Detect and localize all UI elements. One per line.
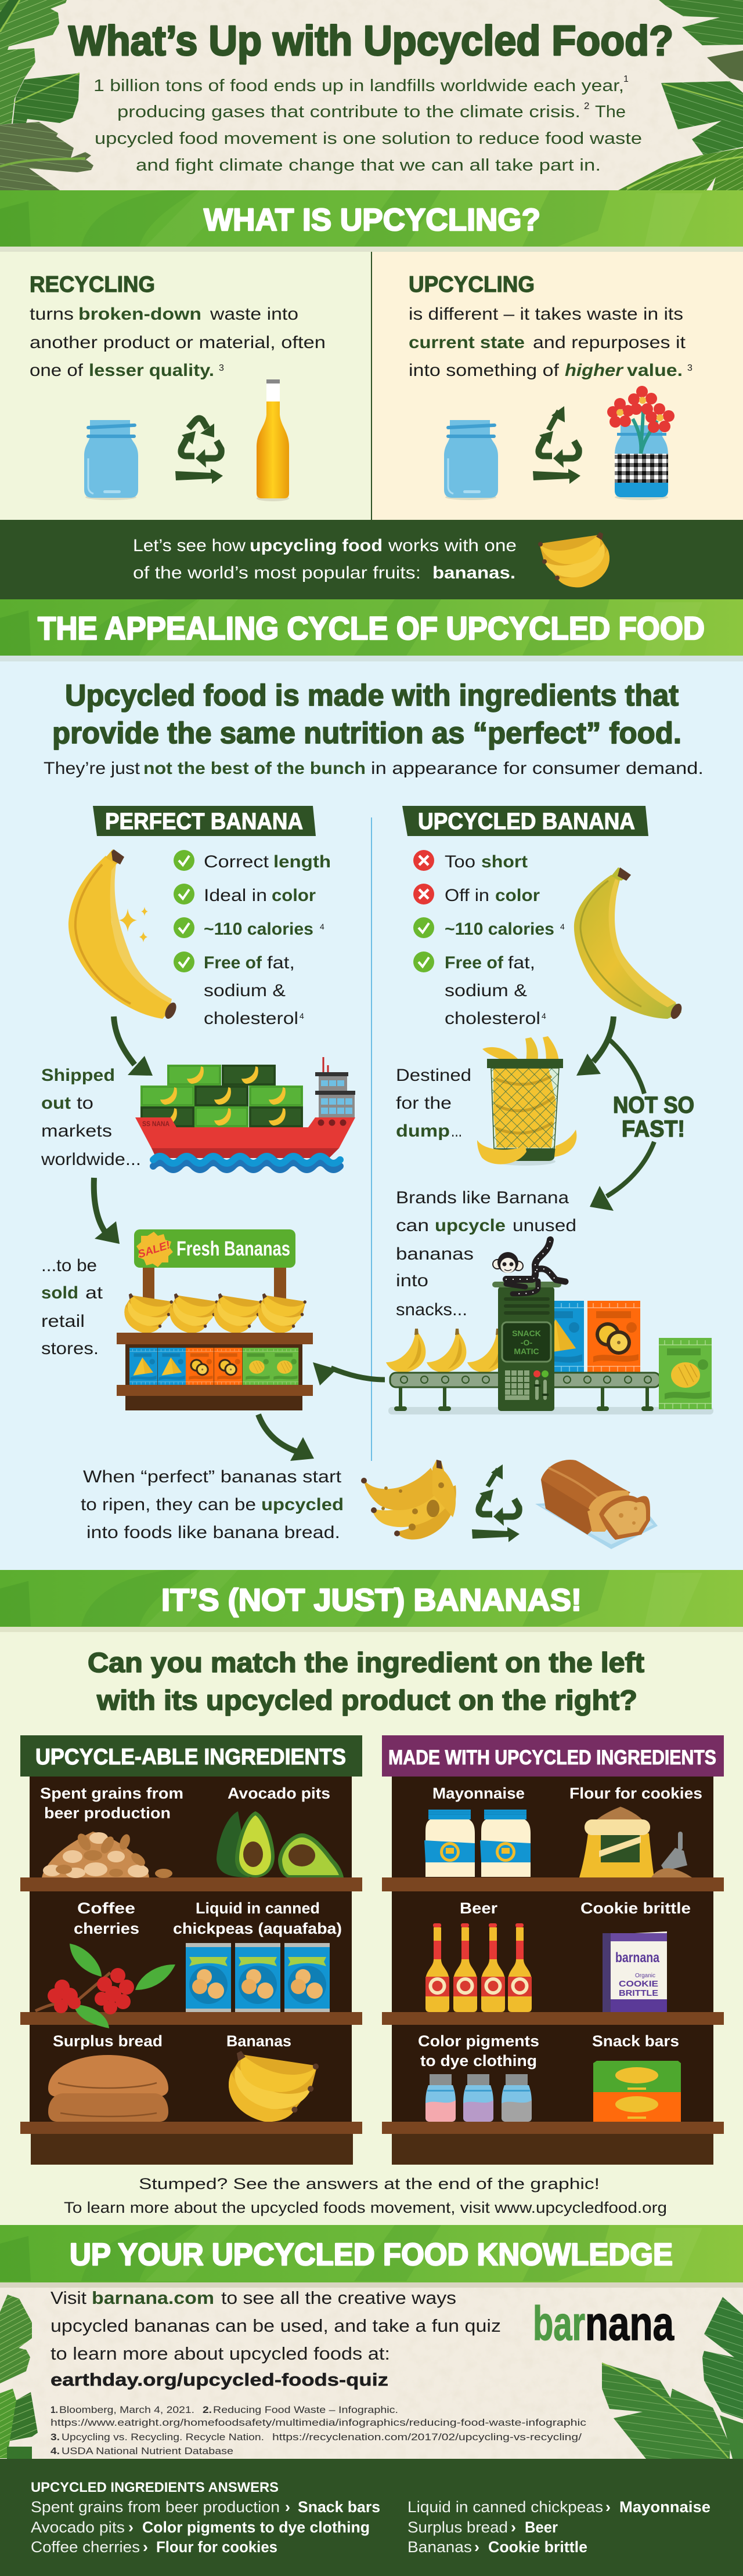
text: visit barnana: to see all the creative ways <box>221 2288 456 2308</box>
header: made with upcycled ingredients <box>382 1735 724 1777</box>
references: 1. <box>51 2404 58 2415</box>
heading: nutrition statement <box>52 679 681 750</box>
shelf labels: Mayonnaise <box>432 1785 525 1802</box>
text: visit barnana: earthday.org/upcycled-foods-quiz <box>51 2369 388 2390</box>
check: color <box>174 884 194 905</box>
references: Upcycling vs. Recycling. Recycle Nation. <box>62 2432 264 2443</box>
arrow <box>533 469 580 484</box>
upcycled banana checklist: sodium & <box>445 981 527 1000</box>
icon: beer bottles <box>425 1923 532 2012</box>
icon: jar vase with flowers <box>607 386 675 500</box>
icon: canned chickpeas <box>186 1943 330 2012</box>
check: length <box>174 850 194 871</box>
upcycled banana checklist <box>413 850 565 1028</box>
text: brands like barnana: into <box>396 1271 428 1290</box>
icon: mayonnaise jars <box>424 1810 531 1877</box>
perfect banana checklist: Correct <box>204 852 269 871</box>
references: Bloomberg, March 4, 2021. <box>59 2404 194 2415</box>
arrow: dump branch <box>610 1040 644 1094</box>
badge: sale <box>136 1232 173 1267</box>
intro paragraph: The <box>595 103 626 121</box>
icon: banana bread <box>535 1460 658 1549</box>
icon: cookie brittle box: barnana <box>615 1950 660 1966</box>
cross: off in color <box>413 884 434 905</box>
check: free of fat <box>413 951 434 972</box>
check: free of fat <box>174 951 194 972</box>
text: ripening bananas <box>81 1467 344 1542</box>
panel: matching game background <box>0 1627 743 2225</box>
icon: empty jar <box>84 420 138 500</box>
section band: not just bananas: IT’S (NOT JUST) BANANAS! <box>161 1583 582 1618</box>
recycling description: 3 <box>219 363 224 373</box>
perfect banana checklist: length <box>273 852 331 871</box>
shelf labels: Cookie brittle <box>580 1900 691 1917</box>
logo: barnana: nana <box>585 2296 675 2350</box>
references <box>51 2404 587 2456</box>
callout: bananas intro band: works with one <box>388 536 517 555</box>
callout: not so fast: NOT SO <box>613 1092 694 1118</box>
icon: bananas <box>229 2051 319 2122</box>
section band: appealing cycle <box>0 599 743 656</box>
intro paragraph: 2 <box>584 100 589 111</box>
arrow: conveyor to store <box>313 1362 385 1385</box>
panel: cycle background <box>0 656 743 1570</box>
heading: recycling: RECYCLING <box>30 272 155 297</box>
badge: sale: SALE! <box>136 1239 172 1261</box>
panel: footer paper background <box>0 2282 743 2459</box>
upcycling description <box>409 305 692 380</box>
icon: coffee cherries <box>35 1944 175 2028</box>
subheading: in appearance for consumer demand. <box>371 759 704 778</box>
answers list: › <box>474 2538 479 2556</box>
answers list: Spent grains from beer production <box>31 2498 280 2516</box>
text: ripening bananas: into foods like banana bread. <box>86 1523 340 1542</box>
text: sold at retail: retail <box>41 1312 85 1331</box>
badge: upcycled banana: UPCYCLED BANANA <box>418 809 635 834</box>
illustration: cargo ship: SS NANA <box>142 1120 169 1128</box>
icon: banana bunch <box>538 532 609 587</box>
intro paragraph: and fight climate change that we can all take part in. <box>136 156 601 175</box>
shelf labels <box>418 1785 702 2070</box>
callout: not so fast: FAST! <box>622 1116 685 1142</box>
illustration: snack-o-matic conveyor <box>386 1240 713 1414</box>
text: shipped out: out <box>41 1094 71 1113</box>
text: brands like barnana: unused <box>513 1216 576 1235</box>
icon: spent grains <box>42 1832 172 1878</box>
text: destined for the dump: ... <box>451 1121 462 1141</box>
callout: bananas intro band: of the world’s most popular fruits: <box>133 563 421 583</box>
illustration: snack-o-matic conveyor: -O- <box>521 1338 532 1347</box>
arrow: banana to dump <box>576 1016 614 1076</box>
panel: recycling <box>0 252 372 520</box>
decorative leaves bottom left <box>0 2295 38 2459</box>
section band: knowledge: UP YOUR UPCYCLED FOOD KNOWLEDGE <box>70 2237 673 2272</box>
icon: recycle symbol <box>181 418 221 468</box>
section band: appealing cycle: THE APPEALING CYCLE OF UPCYCLED FOOD <box>38 610 705 646</box>
shelf labels: to dye clothing <box>420 2052 537 2070</box>
shelf labels <box>40 1785 342 2050</box>
intro paragraph: 1 <box>623 74 629 84</box>
text: brands like barnana: bananas <box>396 1244 474 1264</box>
illustration: fresh bananas market stand <box>117 1229 313 1410</box>
upcycling description: and repurposes it <box>533 333 686 352</box>
text: brands like barnana <box>396 1188 576 1319</box>
icon: upcycle arrows <box>539 406 579 468</box>
title: What’s Up with Upcycled Food? <box>68 18 673 64</box>
upcycled banana checklist: color <box>495 886 540 905</box>
check: calories <box>413 917 434 938</box>
icon: upcycled banana <box>574 867 684 1021</box>
shelf labels: Beer <box>460 1900 498 1917</box>
text: visit barnana: Visit <box>51 2288 86 2308</box>
upcycled banana checklist: short <box>481 852 528 871</box>
references: 3. <box>51 2432 60 2443</box>
section band: what is upcycling <box>0 190 743 252</box>
answers list: Bananas <box>407 2538 472 2556</box>
shelf labels: beer production <box>44 1804 171 1822</box>
illustration: waste basket full of bananas <box>477 1036 576 1166</box>
text: shipped out: worldwide... <box>41 1150 141 1169</box>
perfect banana checklist: Ideal in <box>204 886 267 905</box>
text: destined for the dump <box>396 1066 471 1141</box>
upcycling description: current state <box>409 333 525 352</box>
icon: upcycle arrows <box>479 1464 519 1526</box>
arrow: to brands <box>590 1142 654 1211</box>
text: ripening bananas: upcycled <box>261 1495 344 1514</box>
arrow <box>472 1527 520 1542</box>
callout: bananas intro band <box>0 520 743 599</box>
perfect banana checklist: fat, <box>267 953 295 972</box>
shelf labels: Coffee <box>77 1900 135 1917</box>
icon: barnana monkey <box>493 1240 565 1294</box>
icon: avocado <box>217 1811 344 1877</box>
arrow: banana to ship <box>114 1016 153 1076</box>
logo: barnana <box>533 2296 675 2350</box>
perfect banana checklist: sodium & <box>204 981 286 1000</box>
shelf labels: Snack bars <box>592 2032 679 2050</box>
recycling description <box>30 305 326 380</box>
shelf labels: cherries <box>74 1920 139 1937</box>
callout: bananas intro band: bananas. <box>432 563 515 583</box>
references: 4. <box>51 2445 60 2456</box>
text: destined for the dump: dump <box>396 1121 450 1141</box>
text: sold at retail: sold <box>41 1283 78 1303</box>
upcycling description: into something of <box>409 361 560 380</box>
heading: upcycling: UPCYCLING <box>409 272 535 297</box>
illustration: snack-o-matic conveyor: MATIC <box>514 1347 539 1356</box>
answers list: Coffee cherries <box>31 2538 140 2556</box>
heading: answers: UPCYCLED INGREDIENTS ANSWERS <box>31 2480 279 2495</box>
references: https://recyclenation.com/2017/02/upcycling-vs-recycling/ <box>272 2432 582 2443</box>
callout: not so fast <box>613 1092 694 1142</box>
heading: matching question <box>88 1648 644 1716</box>
references: USDA National Nutrient Database <box>62 2445 233 2456</box>
upcycled banana checklist: fat, <box>508 953 535 972</box>
intro paragraph: 1 billion tons of food ends up in landfills worldwide each year, <box>93 77 624 95</box>
recycling description: turns <box>30 305 74 324</box>
icon: perfect banana <box>68 849 179 1021</box>
arrow <box>175 469 223 484</box>
answers list: Flour for cookies <box>156 2538 277 2556</box>
text: destined for the dump: Destined <box>396 1066 471 1085</box>
answers list: Snack bars <box>298 2498 380 2516</box>
section band: not just bananas <box>0 1570 743 1627</box>
references: 2. <box>203 2404 212 2415</box>
answers list: Liquid in canned chickpeas <box>407 2498 603 2516</box>
text: sold at retail: at <box>85 1283 103 1303</box>
text: visit barnana: upcycled bananas can be used, and take a fun quiz <box>51 2315 501 2336</box>
illustration: snack-o-matic conveyor: SNACK <box>512 1329 541 1338</box>
illustration: cargo ship <box>135 1057 355 1170</box>
icon: ripe banana bunch <box>361 1460 456 1540</box>
answers list: Mayonnaise <box>619 2498 710 2516</box>
text: ripening bananas: to ripen, they can be <box>81 1495 256 1514</box>
icon: surplus bread <box>48 2055 168 2122</box>
answers list: › <box>128 2519 134 2536</box>
shelf labels: Liquid in canned <box>196 1900 320 1917</box>
icon: snack bars <box>593 2061 681 2122</box>
icon: cookie brittle box: COOKIE <box>619 1979 658 1989</box>
text: visit barnana <box>51 2288 501 2390</box>
text: shipped out: to <box>77 1094 93 1113</box>
header: upcycle-able ingredients <box>20 1735 362 1777</box>
text: ripening bananas: When “perfect” bananas start <box>83 1467 342 1486</box>
heading: matching question: Can you match the ingredient on the left <box>88 1648 644 1678</box>
upcycling description: value. <box>627 361 683 380</box>
note: stumped <box>64 2175 667 2216</box>
check: calories <box>174 917 194 938</box>
answers list: Color pigments to dye clothing <box>142 2519 370 2536</box>
icon: cookie brittle box <box>603 1931 667 2012</box>
text: shipped out: Shipped <box>41 1066 115 1085</box>
shelf labels: Spent grains from <box>40 1785 183 1802</box>
recycling description: broken-down <box>78 305 201 324</box>
upcycled banana checklist: Free of <box>445 953 504 972</box>
perfect banana checklist <box>174 850 331 1028</box>
text: shipped out: markets <box>41 1121 112 1141</box>
shelf labels: Avocado pits <box>228 1785 330 1802</box>
illustration: fresh bananas market stand: Fresh Bananas <box>176 1238 290 1260</box>
shelf labels: Bananas <box>226 2032 291 2050</box>
text: visit barnana: to learn more about upcycled foods at: <box>51 2343 390 2364</box>
text: shipped out <box>41 1066 141 1169</box>
callout: bananas intro band: Let’s see how <box>133 536 246 555</box>
section band: knowledge <box>0 2225 743 2282</box>
subheading: not the best of the bunch <box>143 759 366 778</box>
heading: nutrition statement: Upcycled food is made with ingredients that <box>65 679 679 712</box>
text: visit barnana: barnana.com <box>92 2288 214 2308</box>
cross: too short <box>413 850 434 871</box>
upcycling description: is different – it takes waste in its <box>409 305 683 324</box>
answers list: › <box>605 2498 611 2516</box>
arrow: store to banana bread <box>258 1414 314 1461</box>
upcycled banana checklist: ~110 calories <box>445 920 554 939</box>
answers list: › <box>511 2519 516 2536</box>
perfect banana checklist: color <box>272 886 316 905</box>
icon: beer bottle <box>257 379 289 501</box>
text: sold at retail: stores. <box>41 1339 99 1358</box>
perfect banana checklist: 4 <box>300 1011 304 1021</box>
references: https://www.eatright.org/homefoodsafety/multimedia/infographics/reducing-food-waste-infographic <box>51 2417 587 2428</box>
text: sold at retail <box>41 1256 103 1358</box>
shelf labels: chickpeas (aquafaba) <box>173 1920 342 1937</box>
icon: color pigment jars <box>425 2074 532 2122</box>
perfect banana checklist: cholesterol <box>204 1009 298 1028</box>
logo: barnana: bar <box>533 2296 585 2350</box>
answers list: Avocado pits <box>31 2519 125 2536</box>
upcycled banana checklist: 4 <box>560 922 565 931</box>
perfect banana checklist: ~110 calories <box>204 920 313 939</box>
note: stumped: To learn more about the upcycled foods movement, visit www.upcycledfood.org <box>64 2199 667 2216</box>
upcycled banana checklist: 4 <box>542 1011 546 1021</box>
upcycled banana checklist: Too <box>445 852 475 871</box>
text: brands like barnana: snacks... <box>396 1300 467 1319</box>
intro paragraph: upcycled food movement is one solution to reduce food waste <box>95 129 642 148</box>
panel: answers <box>0 2459 743 2576</box>
callout: bananas intro band: upcycling food <box>250 536 383 555</box>
decorative leaves top left <box>0 0 93 190</box>
upcycling description: 3 <box>687 363 692 373</box>
heading: nutrition statement: provide the same nutrition as “perfect” food. <box>52 717 681 750</box>
upcycled banana checklist: cholesterol <box>445 1009 540 1028</box>
answers list: › <box>285 2498 290 2516</box>
decorative leaves top right <box>618 0 743 190</box>
references: Reducing Food Waste – Infographic. <box>213 2404 398 2415</box>
note: stumped: Stumped? See the answers at the end of the graphic! <box>139 2175 600 2193</box>
answers list: Beer <box>525 2519 558 2536</box>
text: destined for the dump: for the <box>396 1094 452 1113</box>
panel: made with upcycled ingredients shelves <box>382 1735 724 2165</box>
intro paragraph <box>93 74 642 175</box>
text: sold at retail: ...to be <box>41 1256 97 1275</box>
shelf labels: Flour for cookies <box>569 1785 702 1802</box>
text: brands like barnana: Brands like Barnana <box>396 1188 569 1207</box>
section band: what is upcycling: WHAT IS UPCYCLING? <box>204 202 540 237</box>
answers list: Surplus bread <box>407 2519 508 2536</box>
decorative leaves bottom right <box>602 2297 743 2459</box>
badge: perfect banana: PERFECT BANANA <box>105 809 303 834</box>
shelf labels: Surplus bread <box>53 2032 163 2050</box>
icon: cookie brittle box: Organic <box>635 1973 655 1979</box>
recycling description: another product or material, often <box>30 333 326 352</box>
answers list: Cookie brittle <box>488 2538 587 2556</box>
subheading: They’re just <box>44 759 140 778</box>
header: upcycle-able ingredients: UPCYCLE-ABLE INGREDIENTS <box>35 1745 346 1770</box>
arrow: ship to store <box>94 1178 120 1244</box>
icon: sparkles <box>119 907 148 942</box>
recycling description: one of <box>30 361 84 380</box>
shelf labels: Color pigments <box>418 2032 539 2050</box>
panel: upcycle-able ingredients shelves <box>20 1735 362 2165</box>
panel: header paper background <box>0 0 743 190</box>
recycling description: lesser quality. <box>89 361 214 380</box>
intro paragraph: producing gases that contribute to the climate crisis. <box>117 103 580 121</box>
text: brands like barnana: upcycle <box>435 1216 506 1235</box>
text: brands like barnana: can <box>396 1216 429 1235</box>
heading: matching question: with its upcycled product on the right? <box>96 1685 637 1716</box>
answers list <box>31 2498 710 2556</box>
perfect banana checklist: Free of <box>204 953 262 972</box>
icon: cookie brittle box: BRITTLE <box>619 1988 658 1998</box>
answers list: › <box>143 2538 148 2556</box>
subheading <box>44 759 704 778</box>
icon: flour sack <box>579 1807 692 1877</box>
upcycled banana checklist: Off in <box>445 886 489 905</box>
icon: empty jar <box>444 420 498 500</box>
panel: upcycling <box>371 252 743 520</box>
upcycling description: higher <box>565 361 625 380</box>
recycling description: waste into <box>210 305 298 324</box>
perfect banana checklist: 4 <box>320 922 324 931</box>
